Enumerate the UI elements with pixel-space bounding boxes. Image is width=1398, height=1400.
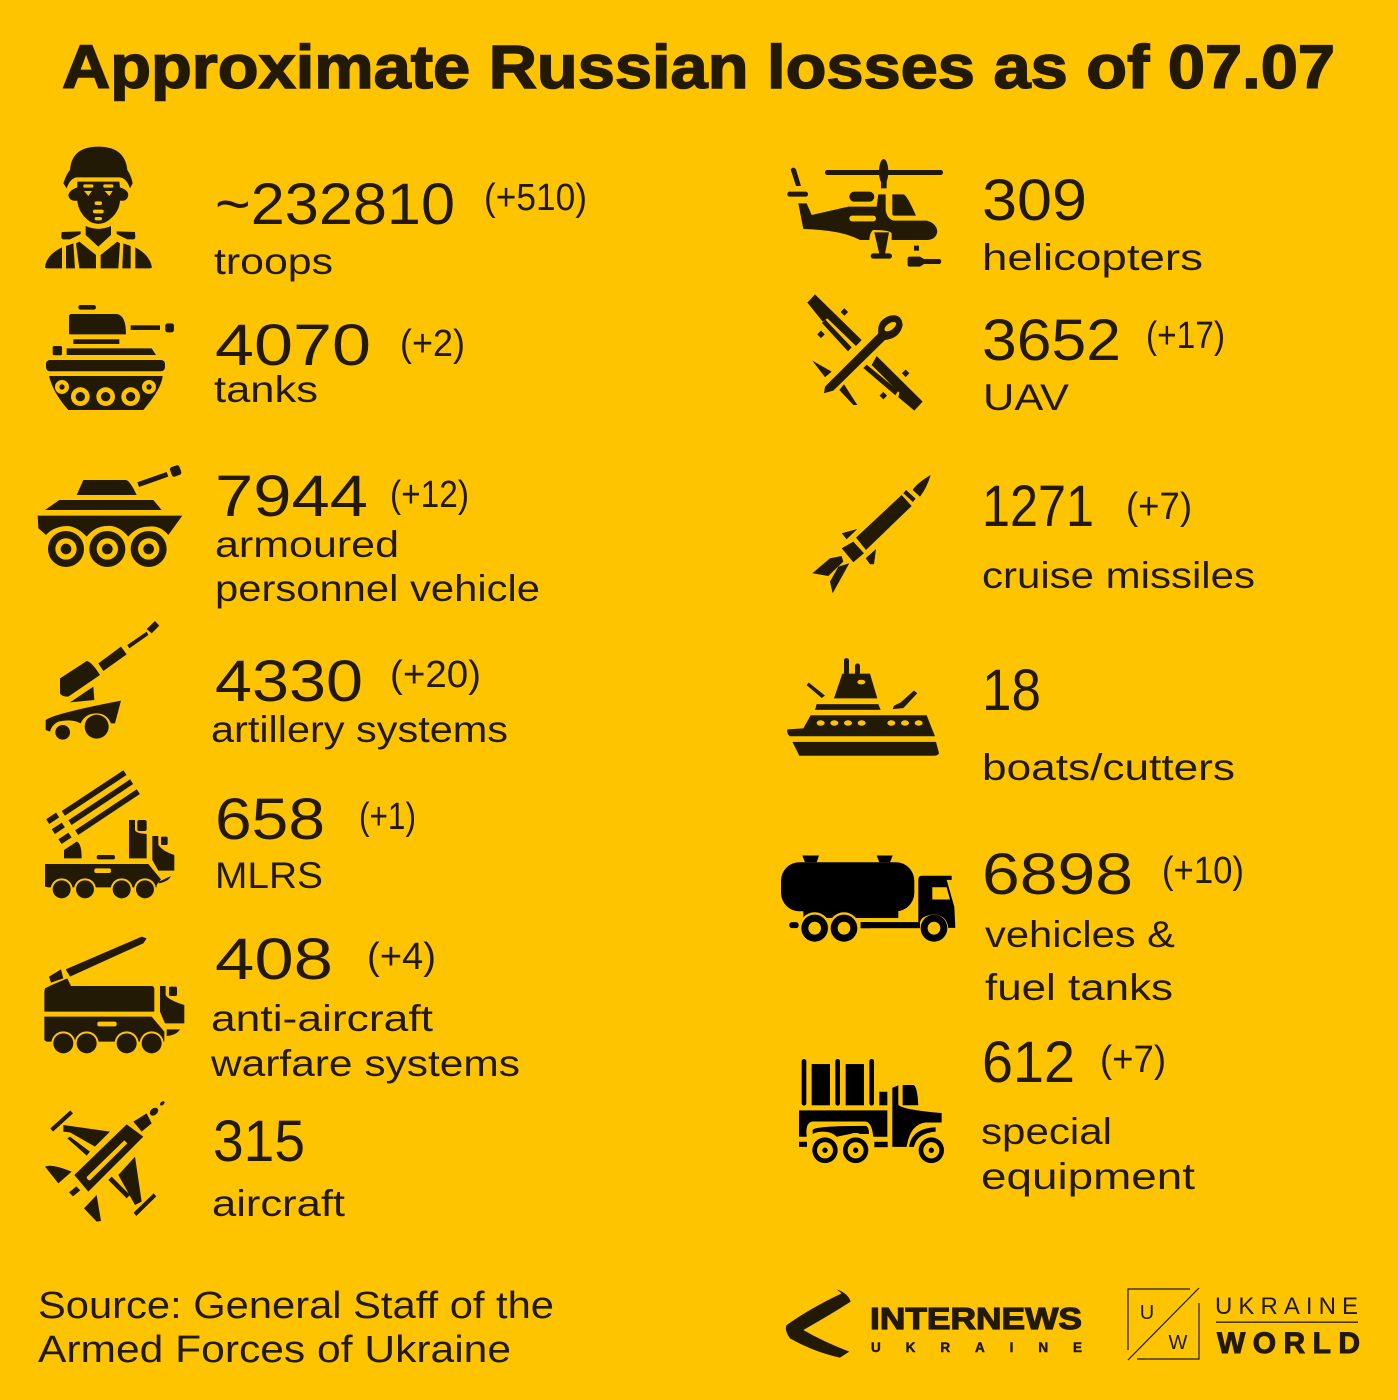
label: helicopters bbox=[982, 237, 1203, 278]
icon: fighter jet bbox=[45, 1100, 165, 1222]
daily change: (+10) bbox=[1162, 850, 1244, 892]
item: artillery systems bbox=[46, 621, 508, 750]
number: ~232810 bbox=[215, 172, 455, 237]
logo: Ukraine World: U bbox=[1140, 1302, 1154, 1324]
daily change: (+17) bbox=[1146, 315, 1225, 357]
item: aircraft bbox=[45, 1100, 346, 1224]
number: 4070 bbox=[215, 313, 371, 378]
icon: warship bbox=[787, 658, 939, 756]
item: cruise missiles bbox=[812, 474, 1255, 596]
label bbox=[210, 998, 520, 1084]
icon: missile bbox=[812, 475, 931, 593]
number: 658 bbox=[215, 787, 325, 852]
number: 18 bbox=[982, 658, 1041, 723]
number: 408 bbox=[215, 927, 333, 992]
label bbox=[985, 914, 1175, 1008]
label: anti-aircraft bbox=[211, 998, 434, 1039]
item: troops bbox=[45, 147, 587, 282]
label: artillery systems bbox=[211, 709, 508, 750]
logo: Ukraine World bbox=[1128, 1288, 1360, 1360]
daily change: (+510) bbox=[484, 177, 587, 219]
item: vehicles and fuel tanks bbox=[781, 842, 1244, 1008]
logo mark: ribbon bbox=[786, 1289, 851, 1358]
icon: artillery bbox=[46, 621, 159, 740]
label bbox=[981, 1111, 1196, 1197]
logo mark: UW square bbox=[1128, 1288, 1199, 1360]
item: UAV bbox=[807, 294, 1225, 418]
label bbox=[215, 524, 540, 609]
logo: Ukraine World: WORLD bbox=[1217, 1327, 1360, 1360]
label: equipment bbox=[981, 1156, 1196, 1197]
label: UAV bbox=[983, 377, 1069, 418]
logo: Internews Ukraine bbox=[786, 1289, 1082, 1358]
icon: rocket launcher bbox=[45, 773, 174, 900]
source note: Armed Forces of Ukraine bbox=[38, 1329, 511, 1371]
label: fuel tanks bbox=[985, 967, 1173, 1008]
logo: Ukraine World: UKRAINE bbox=[1215, 1293, 1358, 1320]
source note: Source: General Staff of the bbox=[38, 1285, 554, 1327]
label: boats/cutters bbox=[982, 747, 1235, 788]
number: 7944 bbox=[215, 464, 368, 529]
logo: Ukraine World: W bbox=[1169, 1332, 1188, 1354]
icon: soldier bbox=[45, 147, 152, 268]
daily change: (+7) bbox=[1126, 486, 1192, 528]
number: 309 bbox=[982, 168, 1087, 233]
logo: Internews Ukraine: UKRAINE bbox=[871, 1340, 1082, 1355]
icon: armoured vehicle bbox=[38, 465, 182, 567]
label: vehicles & bbox=[985, 914, 1175, 955]
icon: helicopter bbox=[787, 159, 943, 267]
number: 6898 bbox=[982, 842, 1133, 907]
daily change: (+12) bbox=[390, 474, 469, 516]
icon: cargo truck bbox=[799, 1059, 944, 1163]
logo: Internews Ukraine: INTERNEWS bbox=[870, 1301, 1082, 1336]
item: helicopters bbox=[787, 159, 1203, 278]
daily change: (+1) bbox=[359, 796, 416, 838]
label: special bbox=[981, 1111, 1112, 1152]
number: 315 bbox=[213, 1109, 305, 1174]
label: cruise missiles bbox=[982, 555, 1255, 596]
daily change: (+4) bbox=[367, 936, 436, 978]
label: warfare systems bbox=[210, 1043, 520, 1084]
label: MLRS bbox=[215, 855, 323, 896]
daily change: (+20) bbox=[390, 654, 481, 696]
number: 1271 bbox=[982, 474, 1094, 539]
label: aircraft bbox=[212, 1183, 346, 1224]
title: Approximate Russian losses as of 07.07 bbox=[62, 33, 1335, 101]
item: special equipment bbox=[799, 1030, 1196, 1197]
source note bbox=[38, 1285, 554, 1371]
number: 4330 bbox=[215, 649, 363, 714]
item: MLRS bbox=[45, 773, 416, 900]
label: armoured bbox=[215, 524, 399, 565]
item: anti-aircraft warfare systems bbox=[44, 927, 520, 1084]
icon: fuel tanker truck bbox=[781, 856, 955, 944]
daily change: (+2) bbox=[400, 323, 465, 365]
label: tanks bbox=[214, 369, 318, 410]
item: boats/cutters bbox=[787, 658, 1235, 788]
item: tanks bbox=[46, 305, 465, 410]
number: 3652 bbox=[982, 308, 1121, 373]
icon: tank bbox=[46, 305, 174, 410]
label: personnel vehicle bbox=[215, 568, 540, 609]
icon: anti-aircraft launcher bbox=[44, 937, 184, 1055]
number: 612 bbox=[982, 1030, 1075, 1095]
item: armoured personnel vehicle bbox=[38, 464, 540, 609]
daily change: (+7) bbox=[1100, 1039, 1166, 1081]
label: troops bbox=[214, 241, 333, 282]
icon: drone bbox=[807, 294, 923, 411]
